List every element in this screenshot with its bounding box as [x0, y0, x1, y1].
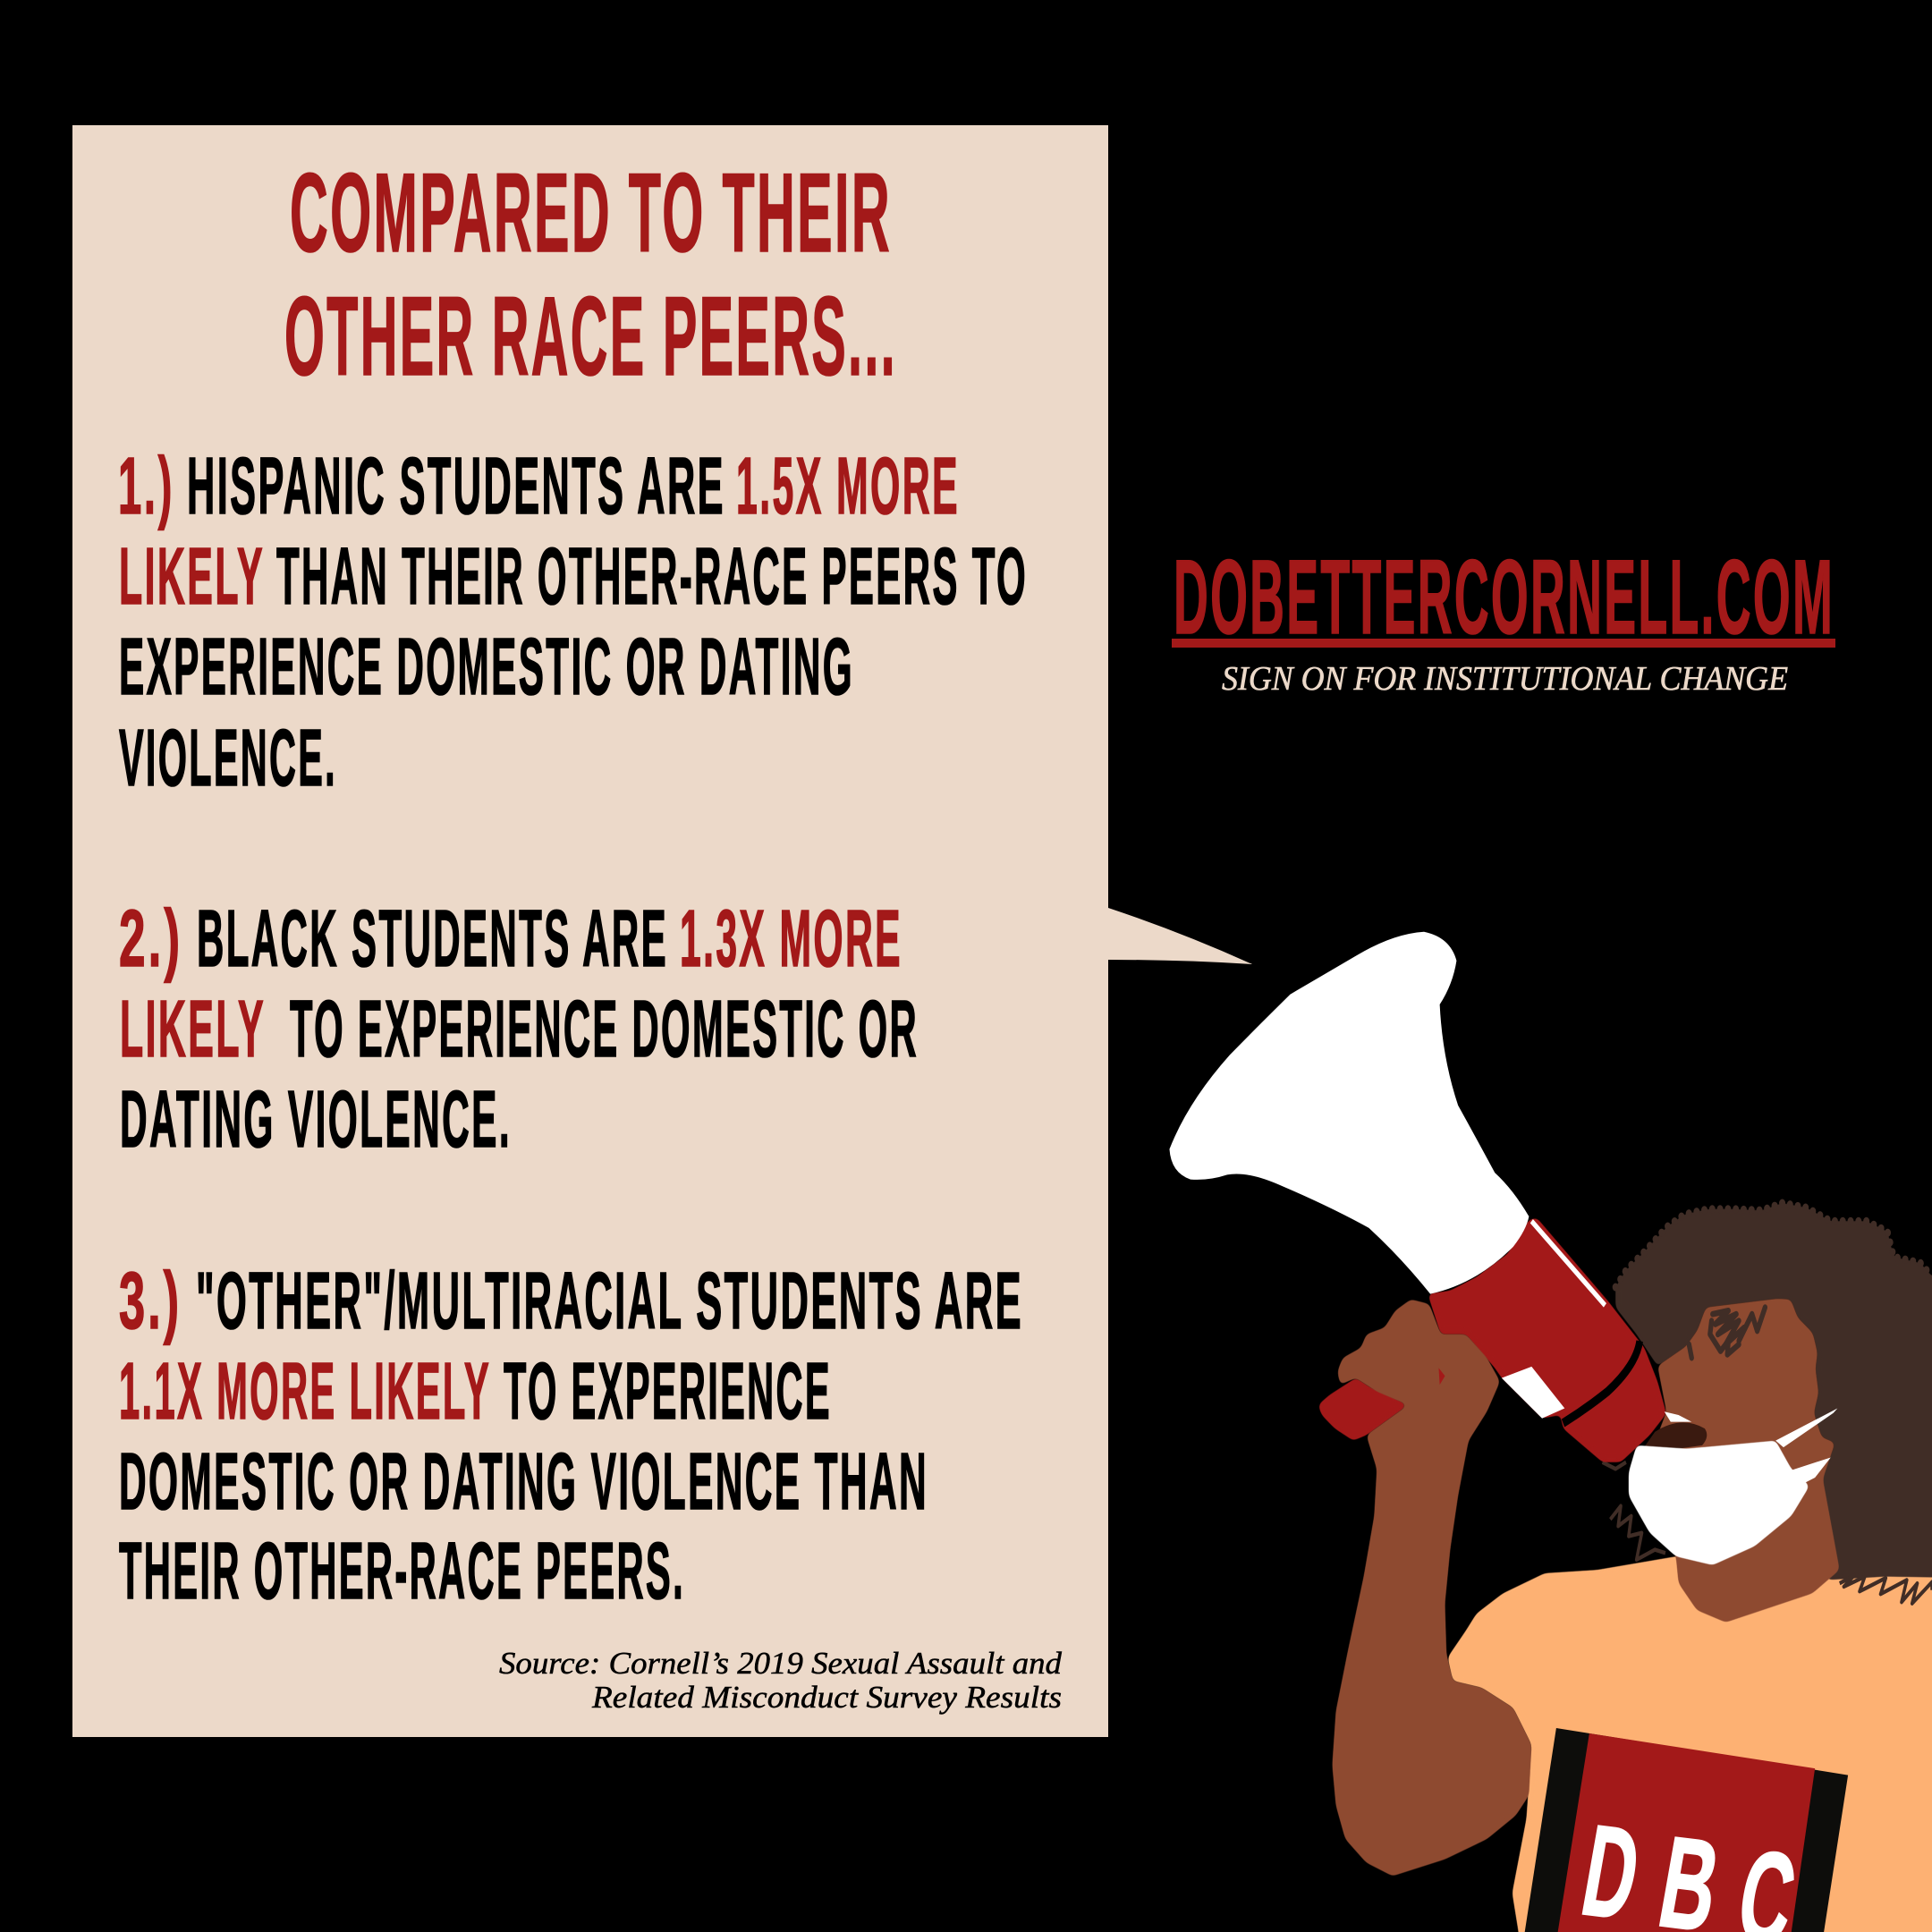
hair curls — [1603, 1462, 1932, 1604]
website call to action — [1172, 538, 1835, 698]
megaphone body — [1169, 932, 1691, 1462]
shirt lettering DBC — [1573, 1798, 1805, 1932]
statistic 2: Black students: 2.) — [119, 894, 182, 984]
statistic 1: Hispanic students: LIKELY — [119, 532, 265, 622]
statistic 1: Hispanic students: VIOLENCE. — [119, 714, 337, 803]
statistic 3: Other/Multiracial students: 3.) — [119, 1257, 182, 1346]
hand red detail — [1438, 1368, 1445, 1385]
source note: Source: Cornell’s 2019 Sexual Assault and — [499, 1646, 1063, 1681]
forehead curls — [1689, 1308, 1765, 1358]
statistic 3: Other/Multiracial students: TO EXPERIENCE — [504, 1347, 832, 1436]
panel: speech bubble with statistics — [72, 125, 1252, 1737]
arm and hand — [1332, 1300, 1531, 1877]
panel: speech bubble with statistics: "OTHER"/MULTIRACIAL STUDENTS ARE — [196, 1257, 1023, 1346]
heading — [284, 151, 897, 399]
statistic 1: Hispanic students: 1.5X MORE — [736, 442, 960, 531]
shirt — [1447, 1556, 1932, 1932]
statistic 2: Black students: 1.3X MORE — [680, 894, 902, 984]
statistic 1: Hispanic students: EXPERIENCE DOMESTIC OR DATING — [119, 623, 854, 712]
statistic 3: Other/Multiracial students — [119, 1257, 1023, 1616]
face and neck — [1634, 1299, 1840, 1623]
panel: speech bubble with statistics: TO EXPERIENCE DOMESTIC OR — [290, 985, 919, 1074]
tagline: SIGN ON FOR INSTITUTIONAL CHANGE — [1222, 660, 1788, 698]
statistic 2: Black students: BLACK STUDENTS ARE — [197, 894, 668, 984]
source note — [499, 1646, 1063, 1715]
panel: speech bubble with statistics: THAN THEIR OTHER-RACE PEERS TO — [276, 532, 1028, 622]
face mask — [1629, 1441, 1809, 1565]
statistic 3: Other/Multiracial students: 1.1X MORE LIKELY — [119, 1347, 491, 1436]
megaphone switch — [1502, 1367, 1564, 1419]
statistic 1: Hispanic students: 1.) — [118, 442, 174, 531]
shirt badge — [1525, 1728, 1848, 1932]
mask ear loops — [1775, 1409, 1837, 1486]
panel: speech bubble with statistics: OTHER RACE PEERS... — [284, 275, 897, 399]
hair — [1615, 1203, 1932, 1580]
source note: Related Misconduct Survey Results — [591, 1680, 1062, 1715]
megaphone white stripe — [1531, 1221, 1605, 1305]
statistic 2: Black students: LIKELY — [120, 985, 266, 1074]
speech bubble tail — [1108, 908, 1252, 964]
mouth highlight — [1665, 1411, 1691, 1422]
statistic 3: Other/Multiracial students: THEIR OTHER-RACE PEERS. — [119, 1527, 685, 1616]
megaphone handle — [1318, 1378, 1408, 1441]
megaphone horn — [1169, 932, 1529, 1294]
statistic 1: Hispanic students: HISPANIC STUDENTS ARE — [187, 442, 725, 531]
statistic 1: Hispanic students — [118, 442, 1028, 803]
statistic 3: Other/Multiracial students: DOMESTIC OR DATING VIOLENCE THAN — [119, 1437, 928, 1527]
panel: speech bubble with statistics: COMPARED TO THEIR — [290, 151, 892, 275]
megaphone black band — [1563, 1341, 1640, 1423]
url underline — [1172, 639, 1835, 648]
statistic 2: Black students — [119, 894, 919, 1165]
illustration: masked protester with megaphone — [1169, 932, 1932, 1932]
megaphone mouthpiece shadow — [1640, 1422, 1707, 1454]
statistic 2: Black students: DATING VIOLENCE. — [120, 1075, 512, 1165]
